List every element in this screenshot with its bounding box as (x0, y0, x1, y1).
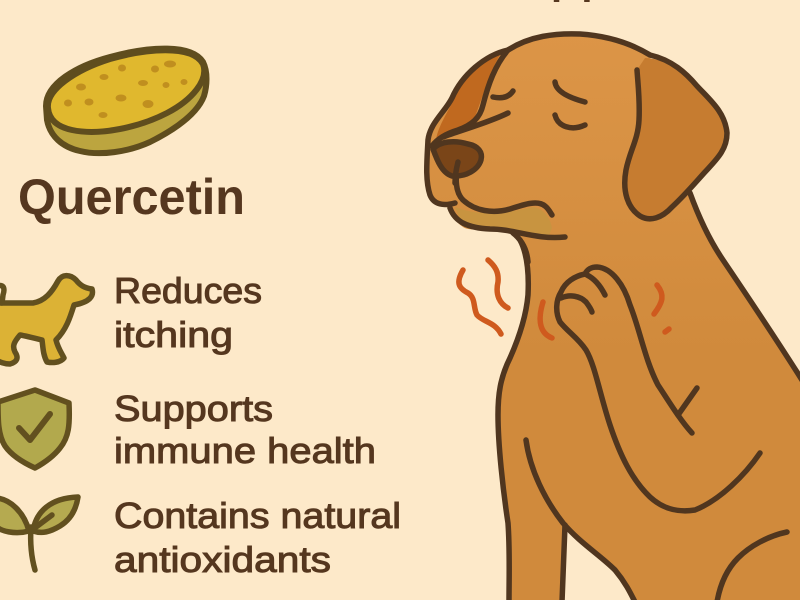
heading: Quercetin: Quercetin (18, 169, 245, 225)
icon: small dog (0, 276, 92, 364)
text: contains natural antioxidants: Contains natural (114, 495, 401, 536)
text: reduces itching (114, 270, 262, 355)
chin shade (455, 207, 552, 238)
illustration: itchy dog (427, 34, 800, 600)
text: supports immune health: Supports (114, 388, 273, 429)
body outlines (498, 193, 800, 600)
icon: shield with check (0, 390, 69, 468)
text: reduces itching: Reduces (114, 270, 262, 311)
head outlines (427, 34, 727, 262)
nose (433, 142, 481, 176)
text: contains natural antioxidants (114, 495, 401, 580)
dog body and head fill (428, 34, 800, 600)
itch marks (459, 260, 669, 338)
text: supports immune health: immune health (114, 430, 376, 471)
leg gap (563, 525, 636, 600)
icon: quercetin capsule (46, 49, 206, 153)
left ear fill (436, 55, 500, 139)
text: reduces itching: itching (114, 314, 233, 355)
text: supports immune health (114, 388, 376, 471)
text: contains natural antioxidants: antioxidants (114, 539, 331, 580)
right ear (625, 58, 726, 220)
icon: sprout (0, 497, 78, 570)
